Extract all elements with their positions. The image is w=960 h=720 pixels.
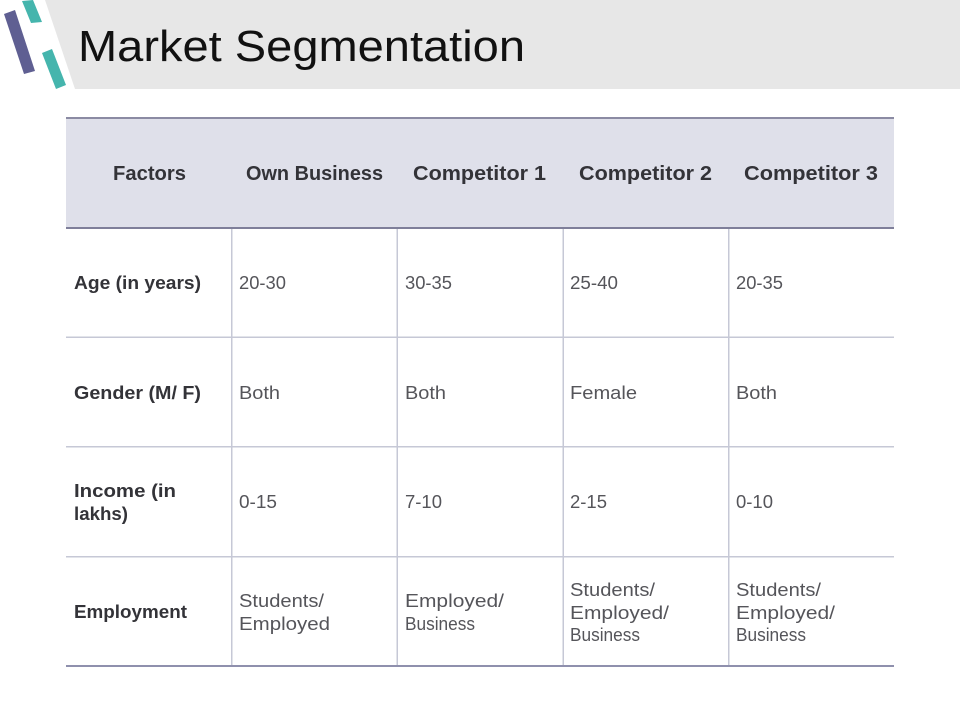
table header row bbox=[66, 117, 894, 229]
row: age: 20-35 bbox=[736, 273, 783, 293]
row: employment: Employed bbox=[239, 614, 330, 634]
row: gender bbox=[74, 383, 777, 403]
table header row: Own Business bbox=[246, 163, 383, 185]
row: employment: Students/ bbox=[239, 591, 324, 611]
row: income: 2-15 bbox=[570, 492, 607, 512]
row: employment: Business bbox=[405, 614, 475, 634]
row: income bbox=[74, 481, 773, 524]
row: employment: Students/ bbox=[570, 580, 655, 600]
table header row: Competitor 3 bbox=[744, 163, 878, 185]
row: employment: Business bbox=[736, 625, 806, 645]
row: employment: Employed/ bbox=[570, 603, 669, 623]
row: gender: Female bbox=[570, 383, 637, 403]
table header row: Competitor 2 bbox=[579, 163, 712, 185]
table header row: Factors bbox=[113, 163, 186, 185]
row: age: 25-40 bbox=[570, 273, 618, 293]
logo accent bars bbox=[4, 0, 66, 89]
row: employment: Business bbox=[570, 625, 640, 645]
row: income: 0-15 bbox=[239, 492, 277, 512]
row: age: 30-35 bbox=[405, 273, 452, 293]
table header row: Competitor 1 bbox=[413, 163, 546, 185]
row: gender: Both bbox=[736, 383, 777, 403]
row: employment bbox=[74, 580, 835, 645]
table bbox=[66, 117, 894, 667]
table grid lines bbox=[66, 229, 894, 667]
row: age: Age (in years) bbox=[74, 273, 201, 293]
row: gender: Both bbox=[239, 383, 280, 403]
row: employment: Employed/ bbox=[736, 603, 835, 623]
title: Market Segmentation bbox=[78, 22, 525, 71]
row: income: 7-10 bbox=[405, 492, 442, 512]
row: age bbox=[74, 273, 783, 293]
title banner bbox=[45, 0, 960, 89]
row: income: Income (in bbox=[74, 481, 176, 501]
row: income: 0-10 bbox=[736, 492, 773, 512]
row: employment: Employed/ bbox=[405, 591, 504, 611]
row: gender: Both bbox=[405, 383, 446, 403]
row: gender: Gender (M/ F) bbox=[74, 383, 201, 403]
row: income: lakhs) bbox=[74, 504, 128, 524]
row: employment: Employment bbox=[74, 602, 187, 622]
row: age: 20-30 bbox=[239, 273, 286, 293]
row: employment: Students/ bbox=[736, 580, 821, 600]
